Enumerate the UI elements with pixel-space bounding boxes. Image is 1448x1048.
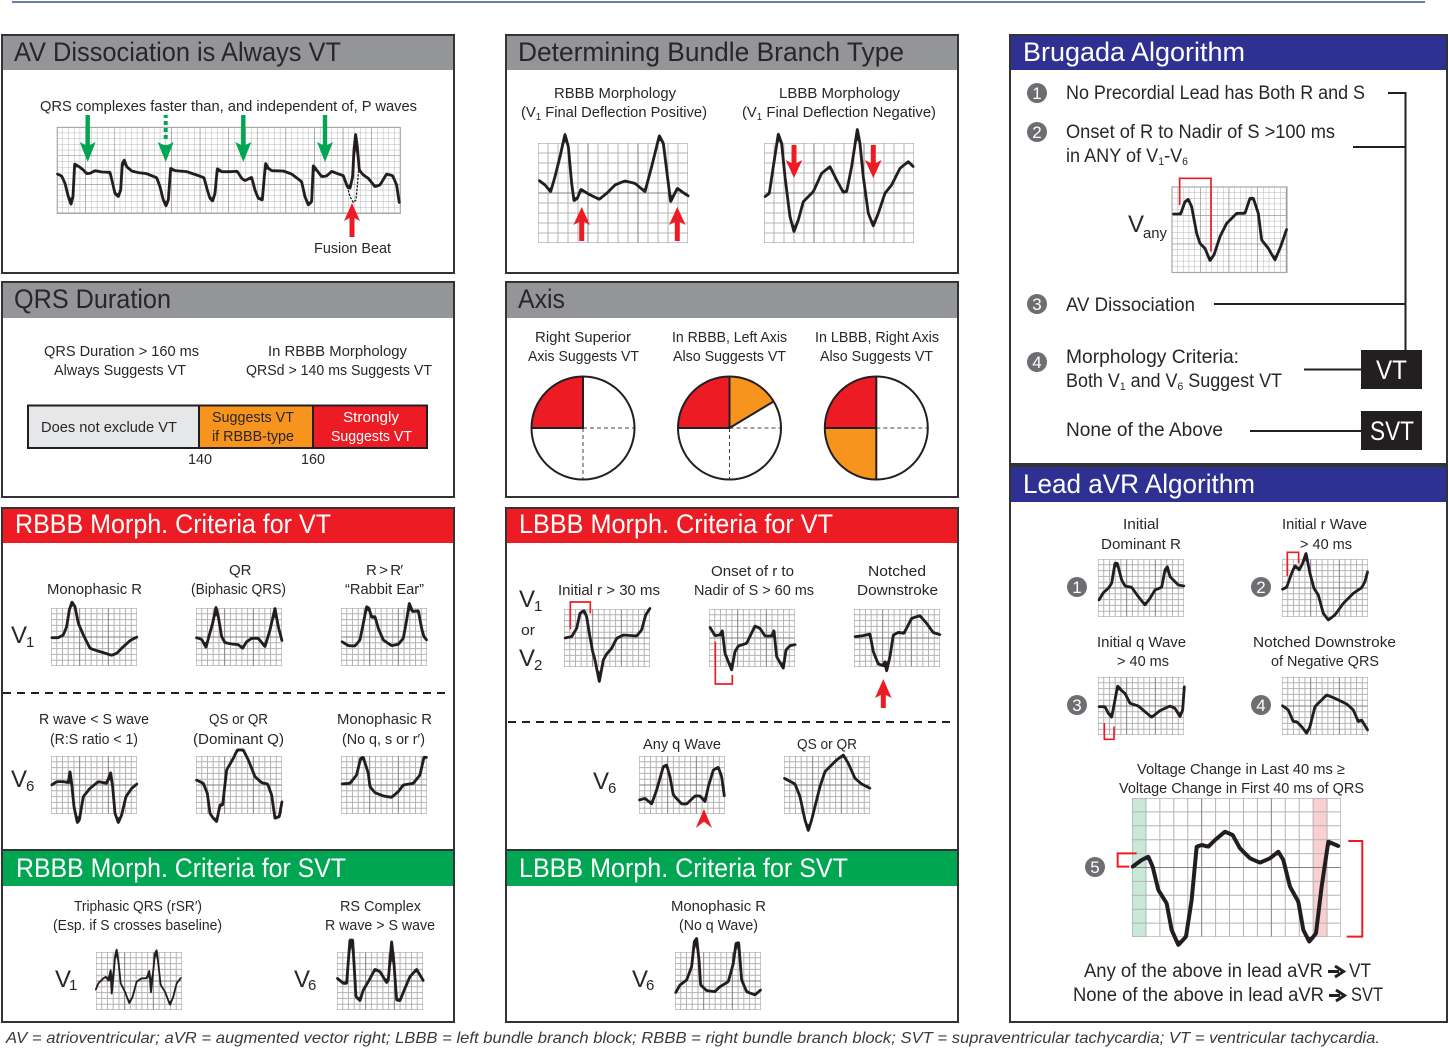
ecg: triphasic: 1 — [69, 977, 77, 994]
ecg: LBBB morphology: LBBB Morphology — [779, 85, 900, 102]
ecg: dominant Q: QS or QR — [209, 711, 268, 728]
text: RBBB left axis: In RBBB, Left Axis — [672, 329, 787, 346]
step 4: and V — [1126, 371, 1178, 392]
ecg: RBBB morphology: RBBB Morphology — [554, 85, 676, 102]
ecg: R less than S: R wave < S wave — [39, 711, 149, 728]
criterion 4 — [1251, 634, 1396, 735]
ecg: V any — [1128, 178, 1287, 272]
ecg: RS complex: RS Complex — [340, 898, 421, 915]
step 4: Suggest VT — [1183, 371, 1282, 392]
step 1: No Precordial Lead has Both R and S — [1066, 83, 1365, 104]
criterion 5: voltage change: 5 — [1090, 858, 1100, 877]
step 2: -V — [1164, 146, 1182, 167]
criterion 2: Initial r Wave — [1282, 516, 1367, 533]
panel: AV dissociation — [2, 35, 454, 273]
text: QRS independent of P waves: QRS complexes faster than, and independent of, P waves — [40, 98, 417, 115]
ecg: rabbit ear: R > R′ — [366, 562, 403, 579]
ecg: monophasic R: (No q Wave) — [679, 917, 758, 934]
ecg: notched downstroke — [854, 563, 940, 708]
ecg: RBBB morphology: 1 — [536, 112, 542, 123]
label: V1 or V2: V — [519, 645, 535, 672]
text: RBBB left axis: Also Suggests VT — [673, 348, 786, 365]
ecg: QR biphasic — [191, 562, 286, 666]
criterion 1 — [1067, 516, 1184, 617]
ecg: LBBB morphology — [742, 85, 936, 243]
step 2: Onset of R to Nadir of S >100 ms — [1066, 122, 1335, 143]
step 4: 1 — [1120, 381, 1126, 393]
criterion 2 — [1251, 516, 1368, 620]
panel: RBBB criteria for VT — [2, 508, 454, 850]
criterion 3: > 40 ms — [1117, 653, 1169, 670]
text: fusion beat: Fusion Beat — [314, 240, 392, 257]
heading: axis: Axis — [518, 284, 565, 314]
arrow: green solid 2 — [235, 115, 251, 162]
step 2: 1 — [1158, 156, 1164, 168]
ecg: monophasic R — [632, 898, 766, 1010]
step 2: in ANY of V — [1066, 146, 1163, 167]
chart: QRS duration bar: 140 — [188, 451, 212, 468]
chart: QRS duration bar: Suggests VT — [212, 409, 294, 426]
ecg: notched downstroke: Downstroke — [857, 582, 938, 599]
step 4: Both V — [1066, 371, 1123, 392]
ecg: monophasic R: V — [632, 966, 648, 993]
ecg: RBBB morphology — [521, 85, 707, 243]
chart: QRS duration bar: if RBBB-type — [212, 428, 294, 445]
criterion 5: voltage change: Voltage Change in First 40 ms of QRS — [1119, 780, 1364, 797]
ecg: monophasic R: Monophasic R — [671, 898, 766, 915]
ecg: triphasic: V — [55, 966, 71, 993]
label: V1 or V2: V — [519, 586, 535, 613]
box: VT: VT — [1376, 355, 1407, 385]
text: none of the above: None of the Above — [1066, 420, 1223, 441]
heading: AV dissociation: AV Dissociation is Always VT — [14, 37, 341, 67]
heading: RBBB VT: RBBB Morph. Criteria for VT — [15, 509, 331, 539]
ecg: initial r: Initial r > 30 ms — [558, 582, 660, 599]
step 4 — [1027, 347, 1282, 393]
arrow: green solid 1 — [80, 115, 96, 162]
heading: bundle branch type: Determining Bundle Branch Type — [518, 37, 904, 67]
arrow: red fusion beat — [344, 203, 360, 237]
criterion 1: Initial — [1123, 516, 1159, 533]
chart: axis circle 3 — [825, 376, 928, 480]
criterion 1: 1 — [1072, 578, 1082, 597]
text: right superior axis: Right Superior — [535, 329, 631, 346]
ecg: V any: V — [1128, 211, 1144, 238]
text: RBBB criterion — [246, 343, 432, 379]
ecg: RS complex: R wave > S wave — [325, 917, 435, 934]
ecg: dominant Q: (Dominant Q) — [193, 731, 284, 748]
label: V6: V — [593, 768, 609, 795]
heading: QRS duration: QRS Duration — [14, 284, 171, 314]
criterion 5: voltage change: Voltage Change in Last 40 ms ≥ — [1137, 761, 1345, 778]
text: right superior axis — [528, 329, 639, 365]
ecg: RBBB morphology: Final Deflection Positive) — [541, 104, 707, 121]
chart: QRS duration bar: Suggests VT — [331, 428, 412, 445]
label: V1: V — [11, 622, 27, 649]
text: conclusion: Any of the above in lead aVR — [1084, 961, 1323, 982]
step 4: 6 — [1178, 381, 1183, 393]
chart: ECG rhythm strip with fusion beat — [57, 127, 400, 213]
heading: RBBB SVT: RBBB Morph. Criteria for SVT — [16, 853, 346, 883]
ecg: monophasic R: 6 — [646, 977, 654, 994]
panel: determining bundle branch type — [506, 35, 958, 273]
step 3: AV Dissociation — [1066, 295, 1195, 316]
ecg: V any: any — [1143, 225, 1167, 242]
ecg: RBBB morphology: (V — [521, 104, 536, 121]
text: RBBB criterion: In RBBB Morphology — [268, 343, 407, 360]
panel: LBBB criteria for SVT — [506, 850, 958, 1022]
text: QRS duration criterion — [44, 343, 199, 379]
step 3: 3 — [1032, 295, 1042, 314]
ecg: monophasic R: Monophasic R — [47, 581, 142, 598]
text: LBBB right axis — [815, 329, 939, 365]
ecg: dominant Q — [193, 711, 284, 822]
ecg: LBBB morphology: Final Deflection Negative) — [762, 104, 936, 121]
heading: aVR: Lead aVR Algorithm — [1023, 469, 1255, 499]
ecg: onset of r to nadir of S: Onset of r to — [711, 563, 794, 580]
criterion 1: Dominant R — [1101, 536, 1181, 553]
criterion 4: Notched Downstroke — [1253, 634, 1396, 651]
label: V6: 6 — [608, 780, 616, 797]
criterion 5: voltage change — [1085, 761, 1364, 945]
ecg: QS or QR — [784, 736, 870, 831]
ecg: rabbit ear — [341, 562, 427, 666]
arrow: green solid 3 — [317, 115, 333, 162]
box: SVT — [1361, 411, 1422, 450]
label: V1: 1 — [26, 634, 34, 651]
footnote: AV = atrioventricular; aVR = augmented vector right; LBBB = left bundle branch block; RBBB = right bundle branch block; SVT = supraventricular tachycardia; VT = ventricular tachycardia. — [5, 1030, 1380, 1047]
ecg: rabbit ear: “Rabbit Ear” — [345, 581, 424, 598]
ecg: QR biphasic: QR — [229, 562, 252, 579]
ecg: onset of r to nadir of S — [694, 563, 814, 684]
criterion 4: of Negative QRS — [1271, 653, 1379, 670]
text: QRS duration criterion: QRS Duration > 160 ms — [44, 343, 199, 360]
step 1: 1 — [1032, 84, 1042, 103]
criterion 3: Initial q Wave — [1097, 634, 1186, 651]
ecg: monophasic R — [47, 581, 142, 666]
ecg: monophasic R no q — [337, 711, 432, 814]
ecg: triphasic: Triphasic QRS (rSR′) — [74, 898, 202, 915]
ecg: LBBB morphology: 1 — [757, 112, 763, 123]
text: conclusion — [1073, 961, 1383, 1006]
step 4: Morphology Criteria: — [1066, 347, 1239, 368]
ecg: any q wave: Any q Wave — [643, 736, 721, 753]
ecg: RS complex: 6 — [308, 977, 316, 994]
label: V6: V — [11, 766, 27, 793]
ecg: RS complex — [294, 898, 435, 1010]
ecg: RS complex: V — [294, 966, 310, 993]
panel: QRS duration — [2, 282, 454, 497]
label: V1 or V2: or — [521, 622, 535, 639]
ecg: monophasic R no q: (No q, s or r′) — [342, 731, 425, 748]
box: VT — [1361, 350, 1422, 389]
text: QRS duration criterion: Always Suggests VT — [54, 362, 186, 379]
ecg: monophasic R no q: Monophasic R — [337, 711, 432, 728]
ecg: QR biphasic: (Biphasic QRS) — [191, 581, 286, 598]
criterion 4: 4 — [1256, 696, 1266, 715]
arrow: green dotted — [158, 115, 174, 162]
step 2 — [1027, 122, 1335, 168]
ecg: onset of r to nadir of S: Nadir of S > 60 ms — [694, 582, 814, 599]
text: conclusion: VT — [1349, 961, 1371, 982]
panel: RBBB criteria for SVT — [2, 850, 454, 1022]
text: conclusion: SVT — [1351, 985, 1383, 1006]
heading: Brugada: Brugada Algorithm — [1023, 37, 1245, 67]
ecg: R less than S — [39, 711, 149, 823]
criterion 3 — [1067, 634, 1186, 739]
label: V1 or V2 — [519, 586, 542, 674]
heading: LBBB SVT: LBBB Morph. Criteria for SVT — [519, 853, 848, 883]
step 2: 2 — [1032, 123, 1042, 142]
text: LBBB right axis: In LBBB, Right Axis — [815, 329, 939, 346]
criterion 3: 3 — [1072, 696, 1082, 715]
chart: axis circle 1 — [532, 376, 634, 480]
text: conclusion: None of the above in lead aVR — [1073, 985, 1324, 1006]
label: V6: 6 — [26, 778, 34, 795]
ecg: notched downstroke: Notched — [868, 563, 926, 580]
box: SVT: SVT — [1370, 416, 1414, 446]
ecg: triphasic: (Esp. if S crosses baseline) — [53, 917, 222, 934]
criterion 2: 2 — [1256, 578, 1266, 597]
ecg: QS or QR: QS or QR — [797, 736, 857, 753]
chart: axis circle 2 — [678, 376, 781, 480]
panel: axis — [506, 282, 958, 497]
criterion 2: > 40 ms — [1300, 536, 1352, 553]
step 2: 6 — [1182, 156, 1188, 168]
panel: lead aVR algorithm — [1010, 466, 1447, 1022]
label: V1 or V2: 2 — [534, 657, 542, 674]
text: right superior axis: Axis Suggests VT — [528, 348, 639, 365]
heading: LBBB VT: LBBB Morph. Criteria for VT — [519, 509, 833, 539]
chart: QRS duration bar: 160 — [301, 451, 325, 468]
label: V1 or V2: 1 — [534, 598, 542, 615]
chart: QRS duration bar: Does not exclude VT — [41, 419, 177, 436]
panel: LBBB criteria for VT — [506, 508, 958, 850]
ecg: any q wave — [639, 736, 725, 828]
chart: QRS duration bar — [28, 405, 427, 468]
text: LBBB right axis: Also Suggests VT — [820, 348, 933, 365]
panel: Brugada algorithm — [1010, 35, 1447, 464]
ecg: initial r — [558, 582, 660, 682]
text: RBBB left axis — [672, 329, 787, 365]
ecg: triphasic — [53, 898, 222, 1010]
ecg: LBBB morphology: (V — [742, 104, 757, 121]
connector lines — [1214, 93, 1406, 431]
top rule — [12, 1, 1425, 3]
chart: QRS duration bar: Strongly — [343, 409, 400, 426]
ecg: R less than S: (R:S ratio < 1) — [50, 731, 138, 748]
text: RBBB criterion: QRSd > 140 ms Suggests VT — [246, 362, 432, 379]
step 4: 4 — [1032, 353, 1042, 372]
